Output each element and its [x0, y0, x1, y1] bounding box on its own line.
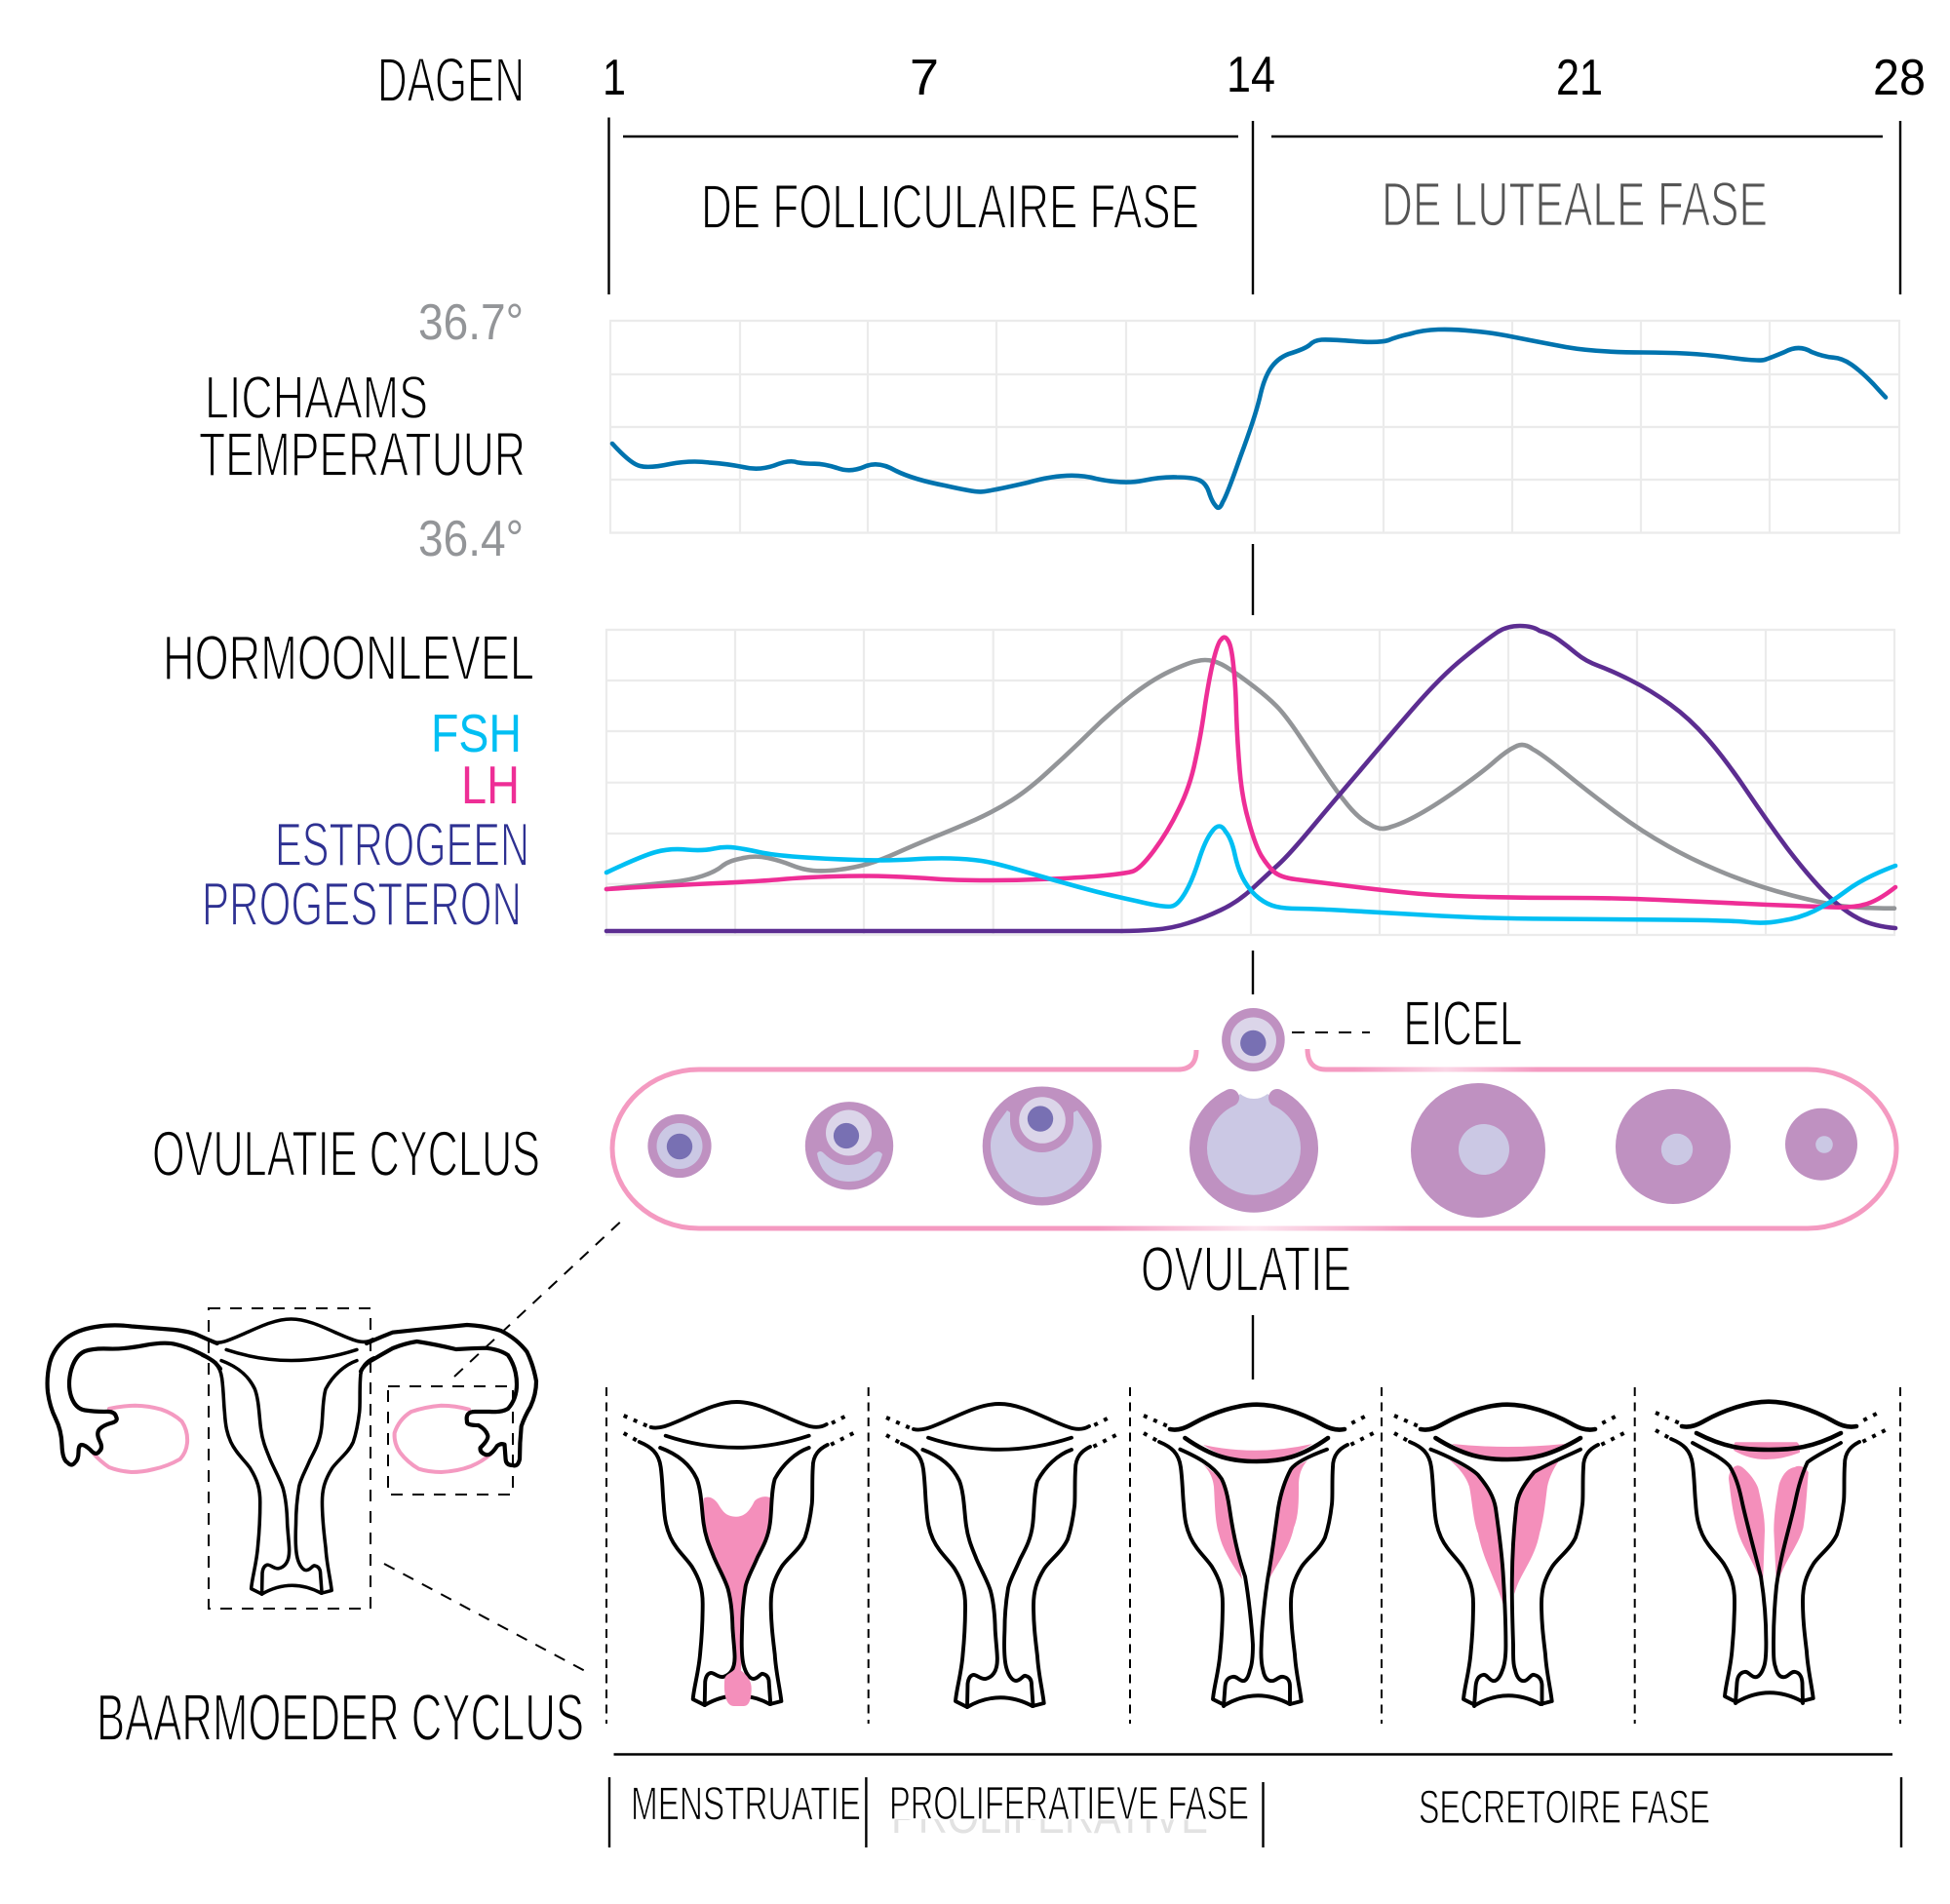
HORMOONLEVEL: HORMOONLEVEL — [163, 622, 534, 693]
label: PROLIFERATIEVE FASE: PROLIFERATIEVE FASE — [889, 1778, 1249, 1830]
corpus luteum 2 — [1616, 1089, 1731, 1204]
fallopian tubes — [48, 1325, 536, 1465]
label: EICEL: EICEL — [1404, 988, 1523, 1059]
label: SECRETOIRE FASE: SECRETOIRE FASE — [1419, 1782, 1710, 1834]
day number axis — [603, 47, 1926, 106]
released egg with dashed leader — [1222, 1008, 1370, 1071]
TEMPERATUUR: TEMPERATUUR — [199, 419, 526, 489]
temperature chart — [610, 321, 1899, 532]
day 21: 21 — [1556, 50, 1603, 106]
heading: follicular phase: DE FOLLICULAIRE FASE — [701, 172, 1199, 242]
PROGESTERON: PROGESTERON — [202, 871, 522, 939]
phase brackets at top — [608, 117, 1900, 294]
day 1: 1 — [603, 50, 626, 106]
label: OVULATIE: OVULATIE — [1141, 1233, 1351, 1304]
dashed day separators — [606, 1387, 1900, 1724]
row label: DAGEN: DAGEN — [377, 45, 525, 115]
uterus 5: late secretory — [1656, 1402, 1886, 1703]
uterus 3: early secretory — [1144, 1405, 1374, 1706]
label: OVULATIE CYCLUS: OVULATIE CYCLUS — [152, 1117, 540, 1189]
uterus 2: proliferative — [886, 1404, 1116, 1707]
estrogen curve — [606, 660, 1894, 909]
FSH curve — [606, 827, 1895, 923]
LICHAAMS: LICHAAMS — [205, 365, 428, 432]
uterine cycle phase brackets — [609, 1755, 1901, 1847]
corpus luteum 3 — [1785, 1108, 1857, 1181]
LH: LH — [461, 755, 520, 815]
ovary cycle capsule — [612, 1049, 1896, 1232]
follicle 2 — [805, 1102, 893, 1190]
uterus 1: menstruation — [624, 1402, 853, 1706]
day 7: 7 — [910, 50, 939, 106]
uterus overview — [203, 1319, 373, 1594]
heading: luteal phase: DE LUTEALE FASE — [1382, 170, 1768, 240]
uterus 4: mid secretory — [1394, 1405, 1624, 1706]
ESTROGEEN: ESTROGEEN — [275, 811, 529, 879]
follicle 4: ovulation — [1198, 1094, 1309, 1204]
day 14 ticks between panels — [1252, 544, 1254, 1379]
FSH: FSH — [431, 703, 522, 763]
progesterone curve — [606, 626, 1895, 931]
ghost text under proliferative: PROLIFERATIVE — [891, 1792, 1208, 1844]
temperature curve — [612, 330, 1886, 508]
ovaries — [94, 1406, 490, 1472]
day 28: 28 — [1873, 50, 1926, 106]
temperature low label: 36.4° — [418, 511, 524, 567]
follicle 1 — [647, 1114, 712, 1178]
reproductive organ overview — [48, 1217, 626, 1672]
hormone chart — [606, 626, 1895, 935]
label: MENSTRUATIE: MENSTRUATIE — [631, 1779, 861, 1831]
temperature high label: 36.7° — [418, 294, 524, 351]
follicle 3 — [983, 1086, 1102, 1205]
temperature axis title — [199, 365, 526, 489]
hormone legend — [163, 622, 534, 939]
label: BAARMOEDER CYCLUS: BAARMOEDER CYCLUS — [97, 1681, 584, 1755]
day 14: 14 — [1227, 47, 1275, 103]
LH curve — [606, 638, 1895, 908]
dashed zoom boxes and leaders — [209, 1217, 626, 1672]
corpus luteum 1 — [1411, 1083, 1545, 1218]
